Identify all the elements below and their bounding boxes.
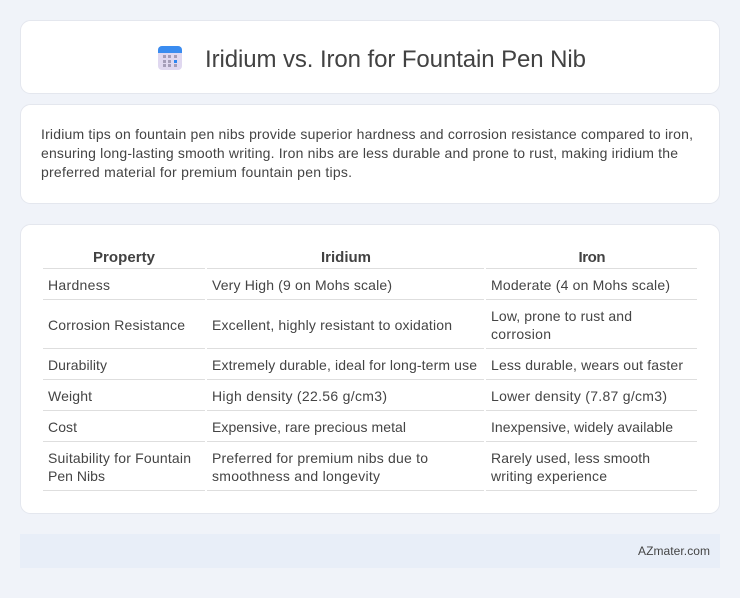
- row: hardness: Moderate (4 on Mohs scale): [491, 277, 670, 293]
- summary text: preferred material for premium fountain pen tips.: [41, 164, 352, 180]
- row: suitability: writing experience: [490, 468, 607, 484]
- row: corrosion resistance: Corrosion Resistance: [48, 317, 185, 333]
- row: suitability: Suitability for Fountain: [48, 450, 191, 466]
- row: cost: Expensive, rare precious metal: [212, 419, 406, 435]
- row: suitability: Pen Nibs: [48, 468, 105, 484]
- row: weight: High density (22.56 g/cm3): [212, 388, 387, 404]
- row: suitability: Rarely used, less smooth: [491, 450, 650, 466]
- table header: Iron: [578, 249, 606, 266]
- row: durability: Durability: [48, 357, 107, 373]
- panel: comparison table: [20, 224, 720, 514]
- row: corrosion resistance: Low, prone to rust and: [491, 308, 632, 324]
- row: hardness: [48, 277, 670, 293]
- title: Iridium vs. Iron for Fountain Pen Nib: [205, 46, 586, 73]
- summary text: ensuring long-lasting smooth writing. Iron nibs are less durable and prone to rust, making iridium the: [41, 145, 678, 161]
- icon: calendar: [158, 46, 182, 70]
- row: hardness: Very High (9 on Mohs scale): [212, 277, 392, 293]
- row: weight: Lower density (7.87 g/cm3): [491, 388, 667, 404]
- row: durability: Less durable, wears out faster: [491, 357, 683, 373]
- row: hardness: Hardness: [48, 277, 110, 293]
- panel: summary: [20, 104, 720, 204]
- row: weight: [48, 388, 667, 404]
- summary text: Iridium tips on fountain pen nibs provide superior hardness and corrosion resistance compared to iron,: [41, 126, 693, 142]
- row: corrosion resistance: Excellent, highly resistant to oxidation: [212, 317, 452, 333]
- row: corrosion resistance: [48, 308, 632, 342]
- footer brand: AZmater.com: [638, 544, 710, 558]
- row: cost: [48, 419, 673, 435]
- row: suitability: Preferred for premium nibs due to: [212, 450, 428, 466]
- row: cost: Inexpensive, widely available: [491, 419, 673, 435]
- table rules: [43, 268, 697, 490]
- row: suitability: smoothness and longevity: [212, 468, 380, 484]
- panel: title: [20, 20, 720, 94]
- row: cost: Cost: [48, 419, 77, 435]
- footer: [20, 534, 720, 568]
- row: corrosion resistance: corrosion: [491, 326, 551, 342]
- row: weight: Weight: [48, 388, 92, 404]
- row: durability: [48, 357, 683, 373]
- table header: Iridium: [321, 249, 371, 266]
- table header: Property: [93, 249, 156, 266]
- table header: [93, 249, 606, 266]
- row: suitability: [48, 450, 650, 484]
- summary text: [41, 126, 693, 180]
- row: durability: Extremely durable, ideal for long-term use: [212, 357, 477, 373]
